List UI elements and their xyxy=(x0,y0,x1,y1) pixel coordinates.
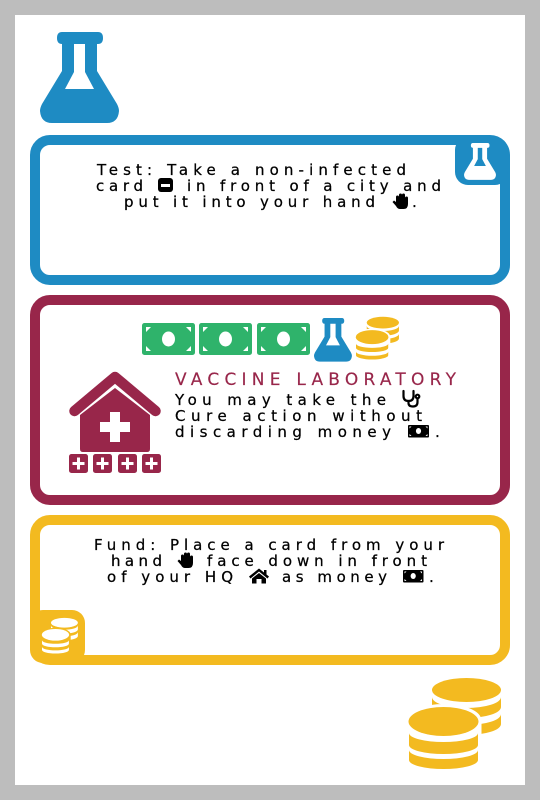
text: fund rule: of your HQ xyxy=(107,568,233,586)
text: test rule: . xyxy=(412,193,417,211)
icon: card minus xyxy=(158,178,173,192)
text: test rule: put it into your hand xyxy=(124,193,375,211)
text: laboratory rule: You may take the xyxy=(174,391,386,409)
icon: stethoscope xyxy=(404,391,419,406)
icon tab: white coins xyxy=(30,610,85,663)
icon: four cube tokens xyxy=(69,454,161,473)
text: test rule xyxy=(96,161,441,211)
cost: three money bills xyxy=(142,323,310,355)
cost: yellow coins xyxy=(356,317,399,360)
text: laboratory rule xyxy=(174,391,440,441)
icon: home xyxy=(249,568,269,584)
icon: black money xyxy=(403,570,424,582)
icon: black money xyxy=(408,425,429,438)
icon: hand xyxy=(392,195,408,209)
text: fund rule: hand xyxy=(111,552,162,570)
text: fund rule: as money xyxy=(282,568,387,586)
panel: vaccine laboratory xyxy=(35,300,505,500)
panel: test action xyxy=(35,137,508,280)
panel: fund action xyxy=(30,520,505,663)
text: fund rule: face down in front xyxy=(207,552,427,570)
icon: house with cross xyxy=(74,377,156,452)
text: laboratory rule: Cure action without xyxy=(175,407,422,425)
text: test rule: in front of a city and xyxy=(187,177,441,195)
text: fund rule xyxy=(94,536,445,586)
text: fund rule: . xyxy=(429,568,434,586)
text: test rule: Test: Take a non-infected xyxy=(96,161,406,179)
heading: vaccine laboratory: VACCINE LABORATORY xyxy=(175,370,457,390)
icon: hand xyxy=(178,554,193,568)
text: test rule: card xyxy=(96,177,143,195)
text: fund rule: Fund: Place a card from your xyxy=(94,536,445,554)
cost: blue flask xyxy=(314,318,352,362)
icon: large yellow coins xyxy=(408,678,501,769)
text: laboratory rule: . xyxy=(435,423,440,441)
icon: large blue flask xyxy=(40,32,119,123)
text: laboratory rule: discarding money xyxy=(175,423,391,441)
icon tab: white flask xyxy=(455,137,508,185)
